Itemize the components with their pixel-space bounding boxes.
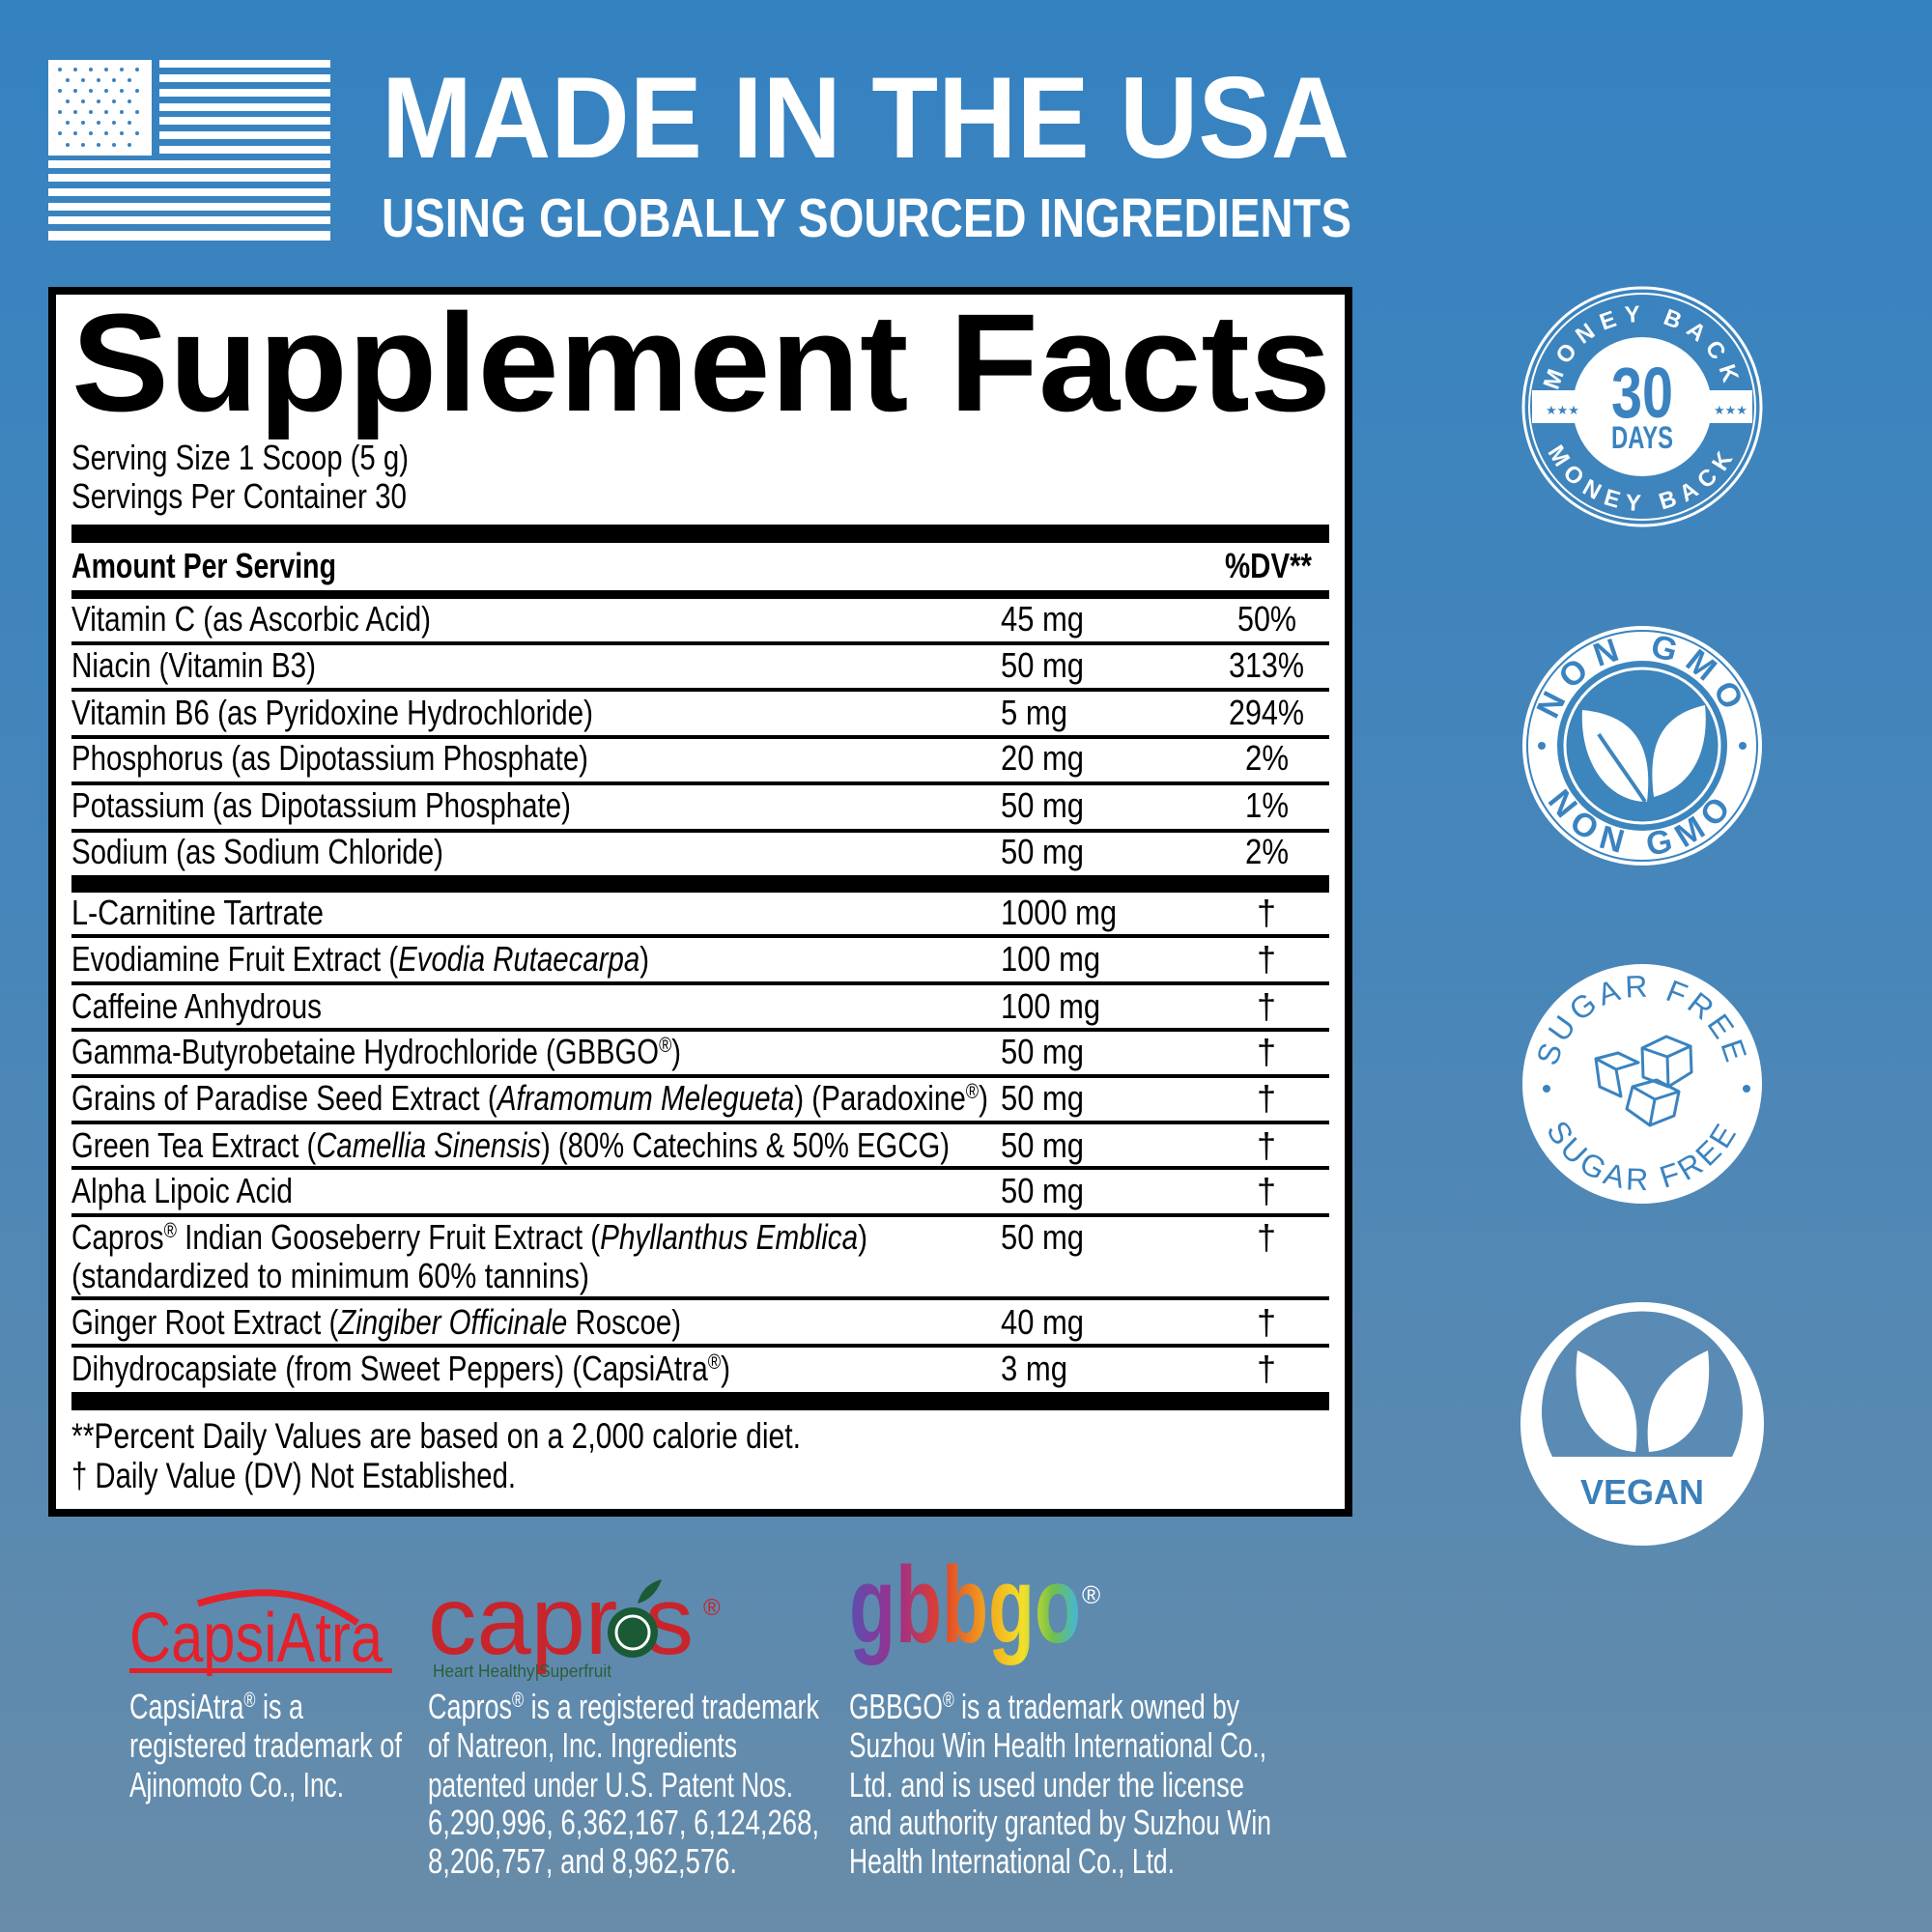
heading: supplement facts: Supplement Facts [71, 285, 1331, 440]
badge: sugar free: SUGAR FREE [1548, 1122, 1737, 1190]
table rows: other ingredients: Evodiamine Fruit Extract (Evodia Rutaecarpa) [71, 939, 649, 979]
icon: US flag [48, 60, 330, 241]
table rows: other ingredients: † [1257, 939, 1276, 979]
table header [71, 546, 1312, 585]
table rows: other ingredients: † [1257, 1217, 1276, 1257]
text block: Capros trademark: of Natreon, Inc. Ingredients [428, 1725, 737, 1765]
table rows: other ingredients: Capros [71, 1217, 184, 1257]
table rows: vitamins and minerals: Niacin (Vitamin B3) [71, 645, 316, 685]
table rows: other ingredients: † [1257, 1302, 1276, 1342]
table header: Amount Per Serving [71, 546, 336, 585]
text block: Capros trademark: 8,206,757, and 8,962,576. [428, 1841, 737, 1881]
table rows: other ingredients: Alpha Lipoic Acid [71, 1171, 293, 1210]
table rows: other ingredients: ® [659, 1033, 671, 1057]
badge: vegan: VEGAN [1580, 1472, 1704, 1512]
table rows: other ingredients: ) [721, 1349, 730, 1388]
text block: CapsiAtra trademark: Ajinomoto Co., Inc. [129, 1765, 344, 1804]
table rows: other ingredients: ® [966, 1079, 979, 1103]
badge: 30 days money back: ★★★ [1714, 403, 1747, 417]
table rows: other ingredients: ) [671, 1032, 681, 1071]
table rows: vitamins and minerals: 50 mg [1001, 645, 1084, 685]
subtitle: USING GLOBALLY SOURCED INGREDIENTS [382, 187, 1351, 249]
text block: CapsiAtra trademark: registered trademark of [129, 1725, 403, 1765]
text block: GBBGO trademark: is a trademark owned by [954, 1687, 1239, 1726]
logo: gbbgo: ® [1082, 1580, 1100, 1609]
table rows: vitamins and minerals: 2% [1245, 832, 1289, 871]
table rows: other ingredients: ® [708, 1350, 721, 1374]
logo: capros: Heart Healthy|Superfruit [433, 1662, 611, 1681]
table rows: other ingredients: ) [979, 1078, 988, 1118]
text block: Capros trademark: is a registered trademark [524, 1687, 820, 1726]
panel: supplement facts [52, 285, 1349, 1513]
badge: 30 days money back: MONEY BACK [1543, 305, 1739, 390]
footnotes [71, 1416, 801, 1495]
table rows: other ingredients: 1000 mg [1001, 893, 1117, 932]
table rows: other ingredients: Grains of Paradise Seed Extract (Aframomum Melegueta) (Paradoxine [71, 1078, 1003, 1118]
table rows: vitamins and minerals: 50% [1237, 599, 1296, 639]
table rows: other ingredients: † [1257, 986, 1276, 1026]
table rows: vitamins and minerals: Vitamin B6 (as Pyridoxine Hydrochloride) [71, 693, 593, 732]
logo: capros: ® [703, 1595, 721, 1621]
table rows: other ingredients: 40 mg [1001, 1302, 1084, 1342]
table rows: other ingredients: † [1257, 1349, 1276, 1388]
text block: CapsiAtra trademark [129, 1687, 403, 1804]
badge: non GMO: NON GMO [1548, 788, 1727, 854]
text block: CapsiAtra trademark: is a [256, 1687, 304, 1726]
table rows: other ingredients: † [1257, 1032, 1276, 1071]
serving info [71, 438, 409, 516]
table rows: other ingredients: 50 mg [1001, 1217, 1084, 1257]
text block: CapsiAtra trademark: ® [243, 1688, 256, 1712]
text block: Capros trademark: patented under U.S. Patent Nos. [428, 1765, 793, 1804]
table rows: other ingredients [71, 893, 1276, 1388]
table rows: other ingredients: Indian Gooseberry Fruit Extract ( [177, 1217, 600, 1257]
table rows: other ingredients: Gamma-Butyrobetaine Hydrochloride (GBBGO [71, 1032, 794, 1071]
serving info: Servings Per Container 30 [71, 476, 407, 516]
table rows: other ingredients: † [1257, 1125, 1276, 1165]
text block: GBBGO trademark [849, 1687, 1271, 1881]
badge: 30 days money back: MONEY BACK [1548, 444, 1733, 511]
table rows: other ingredients: Green Tea Extract (Camellia Sinensis) (80% Catechins & 50% EGCG) [71, 1125, 950, 1165]
table rows: vitamins and minerals: Vitamin C (as Ascorbic Acid) [71, 599, 431, 639]
text block: GBBGO trademark: Ltd. and is used under the license [849, 1765, 1244, 1804]
footnotes: † Daily Value (DV) Not Established. [71, 1456, 516, 1495]
table rows: vitamins and minerals: 50 mg [1001, 832, 1084, 871]
table rows: vitamins and minerals: 5 mg [1001, 693, 1067, 732]
table rows: vitamins and minerals: 2% [1245, 738, 1289, 778]
badge: 30 days money back: 30 [1611, 353, 1673, 433]
table rows: other ingredients: 50 mg [1001, 1078, 1084, 1118]
serving info: Serving Size 1 Scoop (5 g) [71, 438, 409, 477]
badge: non GMO: NON GMO [1536, 636, 1741, 719]
badge: 30 days money back: ★★★ [1546, 403, 1579, 417]
table rows: other ingredients: 100 mg [1001, 939, 1100, 979]
badge: non GMO [1522, 626, 1762, 866]
table rows: vitamins and minerals: 20 mg [1001, 738, 1084, 778]
table rows: other ingredients: 50 mg [1001, 1125, 1084, 1165]
text block: GBBGO trademark: and authority granted by Suzhou Win [849, 1803, 1271, 1842]
table rows: other ingredients: (standardized to minimum 60% tannins) [71, 1256, 589, 1295]
text block: GBBGO trademark: Suzhou Win Health International Co., [849, 1725, 1266, 1765]
text block: GBBGO trademark: GBBGO [849, 1687, 977, 1726]
table rows: other ingredients: 3 mg [1001, 1349, 1067, 1388]
table rows: other ingredients: Ginger Root Extract (Zingiber Officinale Roscoe) [71, 1302, 681, 1342]
table rows: other ingredients: 50 mg [1001, 1171, 1084, 1210]
text block: GBBGO trademark: ® [943, 1688, 954, 1712]
title: made in the USA: MADE IN THE USA [382, 53, 1350, 183]
table rows: other ingredients: L-Carnitine Tartrate [71, 893, 324, 932]
logo: capros: capr s [428, 1567, 694, 1675]
table rows: other ingredients: † [1257, 1078, 1276, 1118]
logo: gbbgo: gbbgo [849, 1545, 1081, 1665]
text block: CapsiAtra trademark: CapsiAtra [129, 1687, 282, 1726]
table rows: vitamins and minerals: Phosphorus (as Dipotassium Phosphate) [71, 738, 588, 778]
badge: sugar free: SUGAR FREE [1538, 976, 1747, 1065]
table rows: vitamins and minerals: Sodium (as Sodium Chloride) [71, 832, 443, 871]
badge: sugar free [1522, 964, 1762, 1204]
table rows: other ingredients: ® [164, 1218, 177, 1242]
table header: %DV** [1225, 546, 1312, 585]
badge: vegan [1520, 1302, 1764, 1546]
badge: 30 days money back: DAYS [1611, 420, 1673, 455]
logo: CapsiAtra: CapsiAtra [129, 1600, 384, 1677]
table rows: vitamins and minerals: 50 mg [1001, 785, 1084, 825]
footnotes: **Percent Daily Values are based on a 2,000 calorie diet. [71, 1416, 801, 1456]
table rows: other ingredients: 100 mg [1001, 986, 1100, 1026]
text block: Capros trademark: Capros [428, 1687, 540, 1726]
table rows: other ingredients: Caffeine Anhydrous [71, 986, 322, 1026]
text block: GBBGO trademark: Health International Co., Ltd. [849, 1841, 1175, 1881]
badge: 30 days money back [1522, 286, 1762, 527]
table rows: vitamins and minerals: 45 mg [1001, 599, 1084, 639]
text block: Capros trademark: ® [512, 1688, 524, 1712]
table rows: other ingredients: Dihydrocapsiate (from Sweet Peppers) (CapsiAtra [71, 1349, 842, 1388]
table rows: other ingredients: † [1257, 1171, 1276, 1210]
table rows: other ingredients: † [1257, 893, 1276, 932]
table rows: other ingredients: Phyllanthus Emblica) [600, 1217, 913, 1257]
table rows: vitamins and minerals [71, 599, 1304, 871]
table rows: vitamins and minerals: 313% [1229, 645, 1304, 685]
table rows: vitamins and minerals: 294% [1229, 693, 1304, 732]
text block: Capros trademark: 6,290,996, 6,362,167, 6,124,268, [428, 1803, 819, 1842]
table rows: vitamins and minerals: Potassium (as Dipotassium Phosphate) [71, 785, 571, 825]
table rows: other ingredients: 50 mg [1001, 1032, 1084, 1071]
text block: Capros trademark [428, 1687, 820, 1881]
table rows: vitamins and minerals: 1% [1245, 785, 1289, 825]
